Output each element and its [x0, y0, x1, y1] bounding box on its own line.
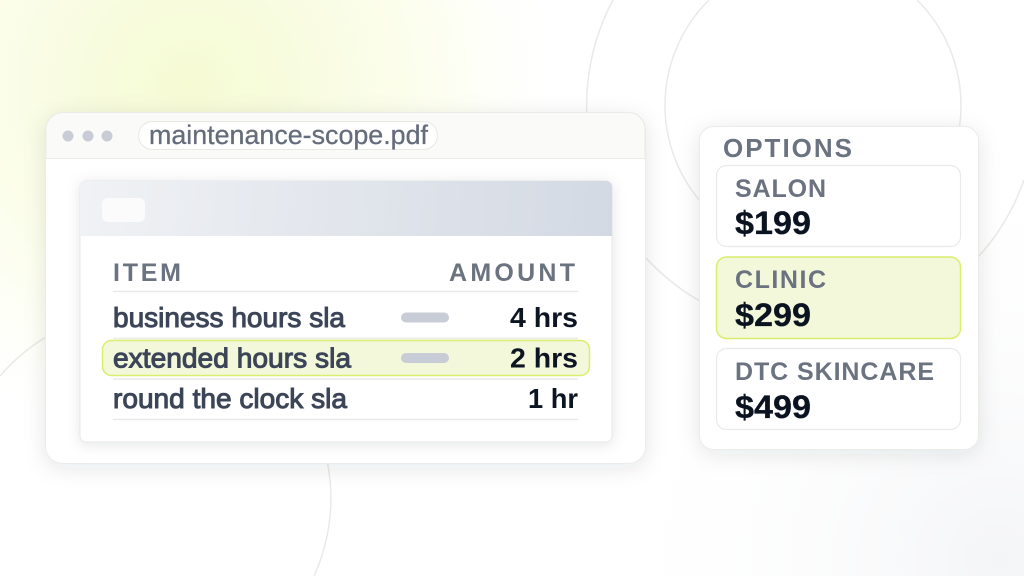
row: round the clock — [113, 383, 578, 414]
row rules — [113, 292, 578, 420]
column heading: item: ITEM — [113, 259, 181, 287]
row: extended hours (highlighted) — [102, 340, 590, 376]
panel: pricing table — [80, 181, 612, 442]
row: round the clock: 1 hr — [528, 383, 578, 414]
row: extended hours (highlighted): 2 hrs — [510, 342, 578, 374]
row: extended hours (highlighted): extended hours sla — [113, 342, 351, 374]
panel: options — [700, 126, 978, 450]
window dots — [62, 130, 112, 142]
table header bar — [80, 181, 612, 236]
filename pill: maintenance-scope.pdf — [149, 120, 428, 150]
row: business hours: business hours sla — [113, 302, 345, 333]
option: salon: SALON — [735, 175, 826, 203]
header placeholder pill — [102, 198, 145, 222]
row: business hours: 4 hrs — [510, 302, 578, 333]
option: salon — [716, 166, 960, 246]
panel: document window — [46, 112, 646, 464]
row: round the clock: round the clock sla — [113, 383, 347, 414]
window title bar — [46, 112, 645, 158]
option: clinic (highlighted): CLINIC — [735, 266, 826, 294]
option: clinic (highlighted): $299 — [735, 297, 811, 333]
option: dtc skincare: DTC SKINCARE — [735, 358, 934, 386]
option: clinic (highlighted) — [716, 257, 960, 338]
option: dtc skincare — [716, 348, 960, 430]
option: dtc skincare: $499 — [735, 389, 811, 425]
options heading: OPTIONS — [723, 133, 852, 163]
option: salon: $199 — [735, 205, 811, 241]
row: business hours — [113, 302, 578, 333]
column heading: amount: AMOUNT — [449, 259, 575, 287]
